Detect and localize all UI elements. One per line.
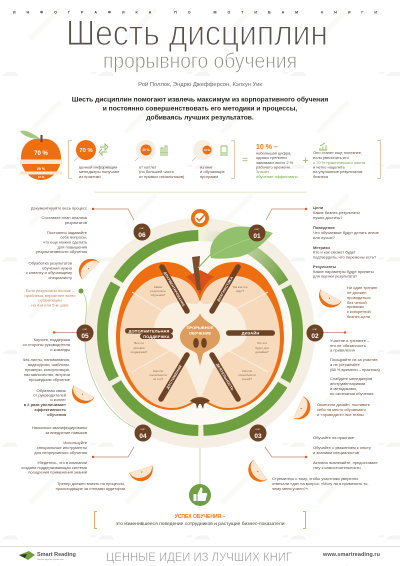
pill: support: ПОДДЕРЖКА [143,334,170,339]
callout: success: это изменившееся поведение сотрудников и растущие бизнес-показатели [116,521,285,527]
text: step 03: Обучайте на практике [313,435,355,440]
footer logo [19,551,76,561]
badge 05: ШАГ [83,328,88,331]
text: step 04: Насколько квалифицированы [32,425,87,430]
text: step 06 client: к клиенту и обучающему [26,270,72,275]
badge 02: ШАГ [313,328,318,331]
captions in apple: идет? [236,289,244,293]
segment 06 [118,236,198,280]
leader dots [53,208,346,458]
icon: thumbs up [189,484,211,506]
text: step 04: специальные инструменты [37,445,87,450]
text: step 06: Постоянно задавайте [47,230,88,235]
text: step 05: примеры, консультации, [25,367,70,372]
header kicker: И Н Ф О Г Р А Ф И К А П О М О Т И В А М К Н И Г И [13,10,377,14]
text: improvement: с 70 % практического опыта [313,160,366,165]
captions in apple: ролей? [242,377,252,381]
bottom calyx [190,397,210,409]
text: learners: Стремитесь к тому, чтобы участники уверенно [272,476,359,481]
bracket: right of sources [231,140,234,178]
text: bad results note: проблема, вероятнее всего [25,293,76,298]
seeds [193,338,199,348]
text: 10 percent: небольшая цифра, [256,150,291,156]
text: step 01: Цели [313,205,324,210]
text: bad results note: на 4-м или 5-м шаге [31,302,69,308]
badge 04: 04 [139,433,147,440]
text: step 03: тягу к самостоятельности [313,465,361,470]
stat: 70 percent: 70 % [79,148,93,154]
captions in apple: Все ли [134,341,144,345]
bracket: far right [377,140,380,178]
text: feedback: от руководителей [33,392,66,398]
text: step 06 client: обучения нужна [42,266,73,270]
captions in apple: способности [149,373,167,377]
text: step 06: Составьте план анализа [42,215,88,220]
text: step 04: поощрения применения знаний [28,470,87,474]
equals sign: = [242,155,248,166]
center label: ПРОРЫВНОЕ [187,325,214,330]
icon: check [191,209,209,227]
captions in apple: способности [238,373,256,377]
text: step 05: Чек-листы, напоминания, [23,357,70,362]
pill: define: ДИАГНОСТИКА [216,276,234,302]
text: step 03: Обучайте с уважением к опыту [313,445,371,450]
captions in apple: результаты [150,289,166,293]
text: step 03: Активно вовлекайте, предоставьте [313,460,378,465]
badge 01: ШАГ [255,228,260,231]
text: step 06 client: специалисту [48,275,72,280]
panel: 70-20-10 orange [20,131,62,180]
pill: document: ДОКУМЕНТИРОВАНИЕ [163,271,186,308]
lead text: и постоянно совершенствовать его методики и процессы, [103,106,297,112]
text: feedback: эффективность [34,407,67,412]
text: step 05: и команды [50,347,70,352]
badge 01 [248,224,266,242]
text: step 01: Кто и как сможет будет [313,250,356,254]
text: step 05: видеоуроки, шаблоны, [28,362,70,367]
plus sign: + [302,155,309,167]
icon: slice bottom left [129,465,156,484]
text: no training note: бизнес-цели [347,314,370,319]
center label: ОБУЧЕНИЕ [189,330,211,336]
text: 10 percent: Значит, [256,169,270,174]
text: step 05: наставничество, встречи [24,372,70,377]
captions in apple: дизайна? [255,350,269,354]
text: step 04: для непрерывного обучения [34,450,87,455]
text: step 04: Используйте [63,440,88,445]
text: step 01: Что обучаемые будут делать иначе [313,230,380,235]
badge 03 [250,424,266,442]
apple core [153,300,247,396]
text: step 02: Участие в тренинге – [330,338,370,343]
text: trainer: происходящие за стенами аудитории [56,486,125,491]
text: design: Окончили дизайн: поставьте [317,402,371,407]
text: feedback: Обратная связь [37,388,66,393]
text: improvement: бизнеса [313,174,329,179]
text: no training note: проводиться [347,295,370,300]
stat: 10 percent: программ [200,174,218,179]
pill: deliver [212,355,238,399]
footer logo: Smart Reading [37,552,76,558]
stat: 70 percent: из практики [79,174,101,179]
text: step 05: со стороны руководителя [23,342,70,347]
text: step 04: создана поддерживающая система [21,465,88,470]
callout: success [94,512,306,528]
badge 01: 01 [253,233,261,240]
nucleus [180,313,220,366]
text: no training note: Ни один тренинг [347,285,378,290]
panel: 70-20-10 orange: 10 % [38,175,45,179]
footer logo: Ценные идеи из лучших книг [37,559,64,561]
text: learners: чему меня учили?» [272,486,309,491]
badge 04 [134,424,152,442]
text: step 02: Поощряйте их за участие, [330,357,379,362]
stat: 10 percent: из книг [200,164,213,170]
text: step 01: для оценки результата? [313,274,358,278]
lead text: Шесть дисциплин помогают извлечь максимум из корпоративного обучения [72,96,328,104]
footer tagline: ЦЕННЫЕ ИДЕИ ИЗ ЛУЧШИХ КНИГ [106,552,293,564]
text: step 06: что еще можно сделать [43,240,87,244]
text: 10 percent: рабочего времени. [256,164,291,170]
badge 06 [134,224,150,240]
text: step 06: Документируйте весь процесс [31,206,87,210]
text: step 01: Какие параметры будут приняты [313,269,374,274]
stat: 20 percent: от коллег [139,164,157,170]
captions in apple: Какие [154,285,162,289]
badge 05: 05 [81,333,89,340]
icon: green dot [78,288,84,294]
stat: 70 percent: менеджеры получают [79,169,120,174]
stat: 70 percent: ценной информации [79,164,117,170]
text: no training note: к конкретной [347,309,371,314]
text: step 01: Какие бизнес-результаты [313,210,360,215]
pill: direct [161,355,187,399]
badge 02: 02 [311,333,319,340]
leaf [198,227,273,268]
pill: design [226,330,275,336]
captions in apple: ли это? [153,377,164,381]
text: step 04: Убедитесь, что в компании [37,460,87,465]
text: design: и «проведите» все этапы [317,412,364,417]
text: step 06: результативности обучения [36,249,87,254]
icon: slice upper left [74,254,99,279]
pill: support [125,328,173,339]
bracket: left of sources [68,140,72,178]
footer url: www.smartreading.ru [322,552,380,558]
stat: 10 percent: и обучающих [200,169,225,174]
text: step 06: себе вопросы, [60,234,87,240]
diagram: cycle ring [85,218,315,448]
captions in apple: Так как это [232,285,248,289]
text: 10 percent: однако тренинги [256,155,287,160]
pill: define [212,267,238,311]
text: step 02: и методиками, [330,386,357,391]
text: step 01: подтвердить, что перемены есть? [313,254,377,260]
text: bad results note: Если результаты плохие – [26,288,75,293]
text: step 01: Результаты [313,264,337,269]
text: no training note: привязки [347,304,364,309]
icon: slice left [68,386,94,408]
pill: design: ДИЗАЙН [242,331,259,336]
icon: slice right upper [315,290,341,312]
stat: 70 percent [74,140,120,179]
text: step 05: Коучинг, поддержка [34,337,71,342]
text: step 02: а не устраняйте [330,362,361,367]
badge 06: 06 [138,232,146,239]
text: step 05: прошедшим обучение [29,377,71,382]
text: step 01: нужно достичь? [313,215,343,220]
text: feedback: в 2 раза увеличивает [24,402,66,407]
text: step 04: за внедрение навыков [45,430,87,435]
badge 05 [76,324,94,342]
stat: 20 percent: 20 % [142,148,150,152]
text: improvement: если увеличить его [313,155,350,160]
pill: deliver: ДЕЯТЕЛЬНОСТЬ [215,363,235,392]
text: step 02: (68 % времени – практика) [330,367,381,372]
text: step 02: а привилегия [330,348,355,352]
text: improvement: на улучшение результатов [313,169,362,174]
text: feedback: и коллег [50,397,67,402]
text: 10 percent: занимают всего 2 % [256,160,294,165]
pill: support: ДОПОЛНИТЕЛЬНАЯ [129,328,169,333]
stat: 10 percent [192,140,228,179]
captions in apple: обучения? [151,293,166,297]
text: learners: отвечали «да» на вопрос: «Могу ли я применить то, [272,481,368,486]
text: step 06 client: Обработка результатов [28,260,72,266]
captions in apple: будет для [255,346,269,350]
apple skin [116,262,284,410]
badge 06: ШАГ [140,227,145,230]
icon: slice bottom right [244,460,267,486]
text: step 06: для повышения [58,244,87,250]
text: step 03: и знаниям специалистов [313,450,359,455]
callout: success: УСПЕХ ОБУЧЕНИЯ – [175,514,226,520]
panel: 70-20-10 orange: 70 % [34,151,48,157]
text: step 01: или лучше? [313,235,336,240]
text: step 06: результатов [65,220,87,225]
leaders [54,209,345,485]
captions in apple: Что это [257,341,267,345]
stem glow [186,270,214,295]
badge 04: ШАГ [141,428,146,431]
stem [192,256,201,290]
badge 03: ШАГ [256,428,261,431]
text: step 02: по окончании обучения [330,391,373,396]
captions in apple: условия [133,346,145,350]
text: feedback: обучения [47,412,67,417]
apple flesh [120,276,280,408]
stat: 10 percent: 10 % [204,148,211,152]
title: Шесть дисциплин [66,14,328,53]
text: trainer: Тренер должен влиять на процессы, [57,481,125,486]
badge 03: 03 [254,433,262,440]
text: no training note: без четкой [347,300,367,305]
text: improvement: Оно станет еще полезнее, [313,150,362,155]
apple [116,256,284,410]
stat: 20 percent [135,140,185,179]
lead text: добиваясь лучших результатов. [146,114,254,122]
captions in apple: Смогли [242,369,252,373]
text: step 02: Снабдите менеджеров [330,376,372,381]
authors: Рой Поллок, Эндрю Джефферсон, Кэлхун Уик [138,81,262,88]
text: 10 percent [256,144,299,179]
pill: direct: ДОСТИЖЕНИЯ [166,364,183,390]
panel: 70-20-10 orange: 20 % [37,167,46,171]
text: step 01: Метрики [313,245,330,250]
text: step 02: это не обязанность, [330,343,367,348]
connector: green feedback arc [81,291,135,428]
icon: slice right lower [293,396,314,423]
captions in apple: поддержки? [131,350,148,354]
captions in apple [131,285,269,381]
stat: 20 percent: (по большей части [139,169,174,174]
text: step 01: Поведение [313,225,336,230]
subtitle: прорывного обучения [103,50,297,73]
stat: 20 percent: от прямых начальников) [139,174,185,179]
text: design: себя на место обучаемого [317,407,367,412]
text: improvement: и четко нацелить [313,164,345,170]
text: 10 percent: обучение эффективно [256,174,299,179]
text: no training note: не должен [347,290,366,295]
text: step 02: инструментариями [330,381,365,386]
text: 10 percent: 10 % – [256,144,278,151]
captions in apple: Смогли [153,369,163,373]
text: bad results note: организации [38,298,62,302]
text: improvement [313,143,366,179]
badge 02 [306,324,324,342]
